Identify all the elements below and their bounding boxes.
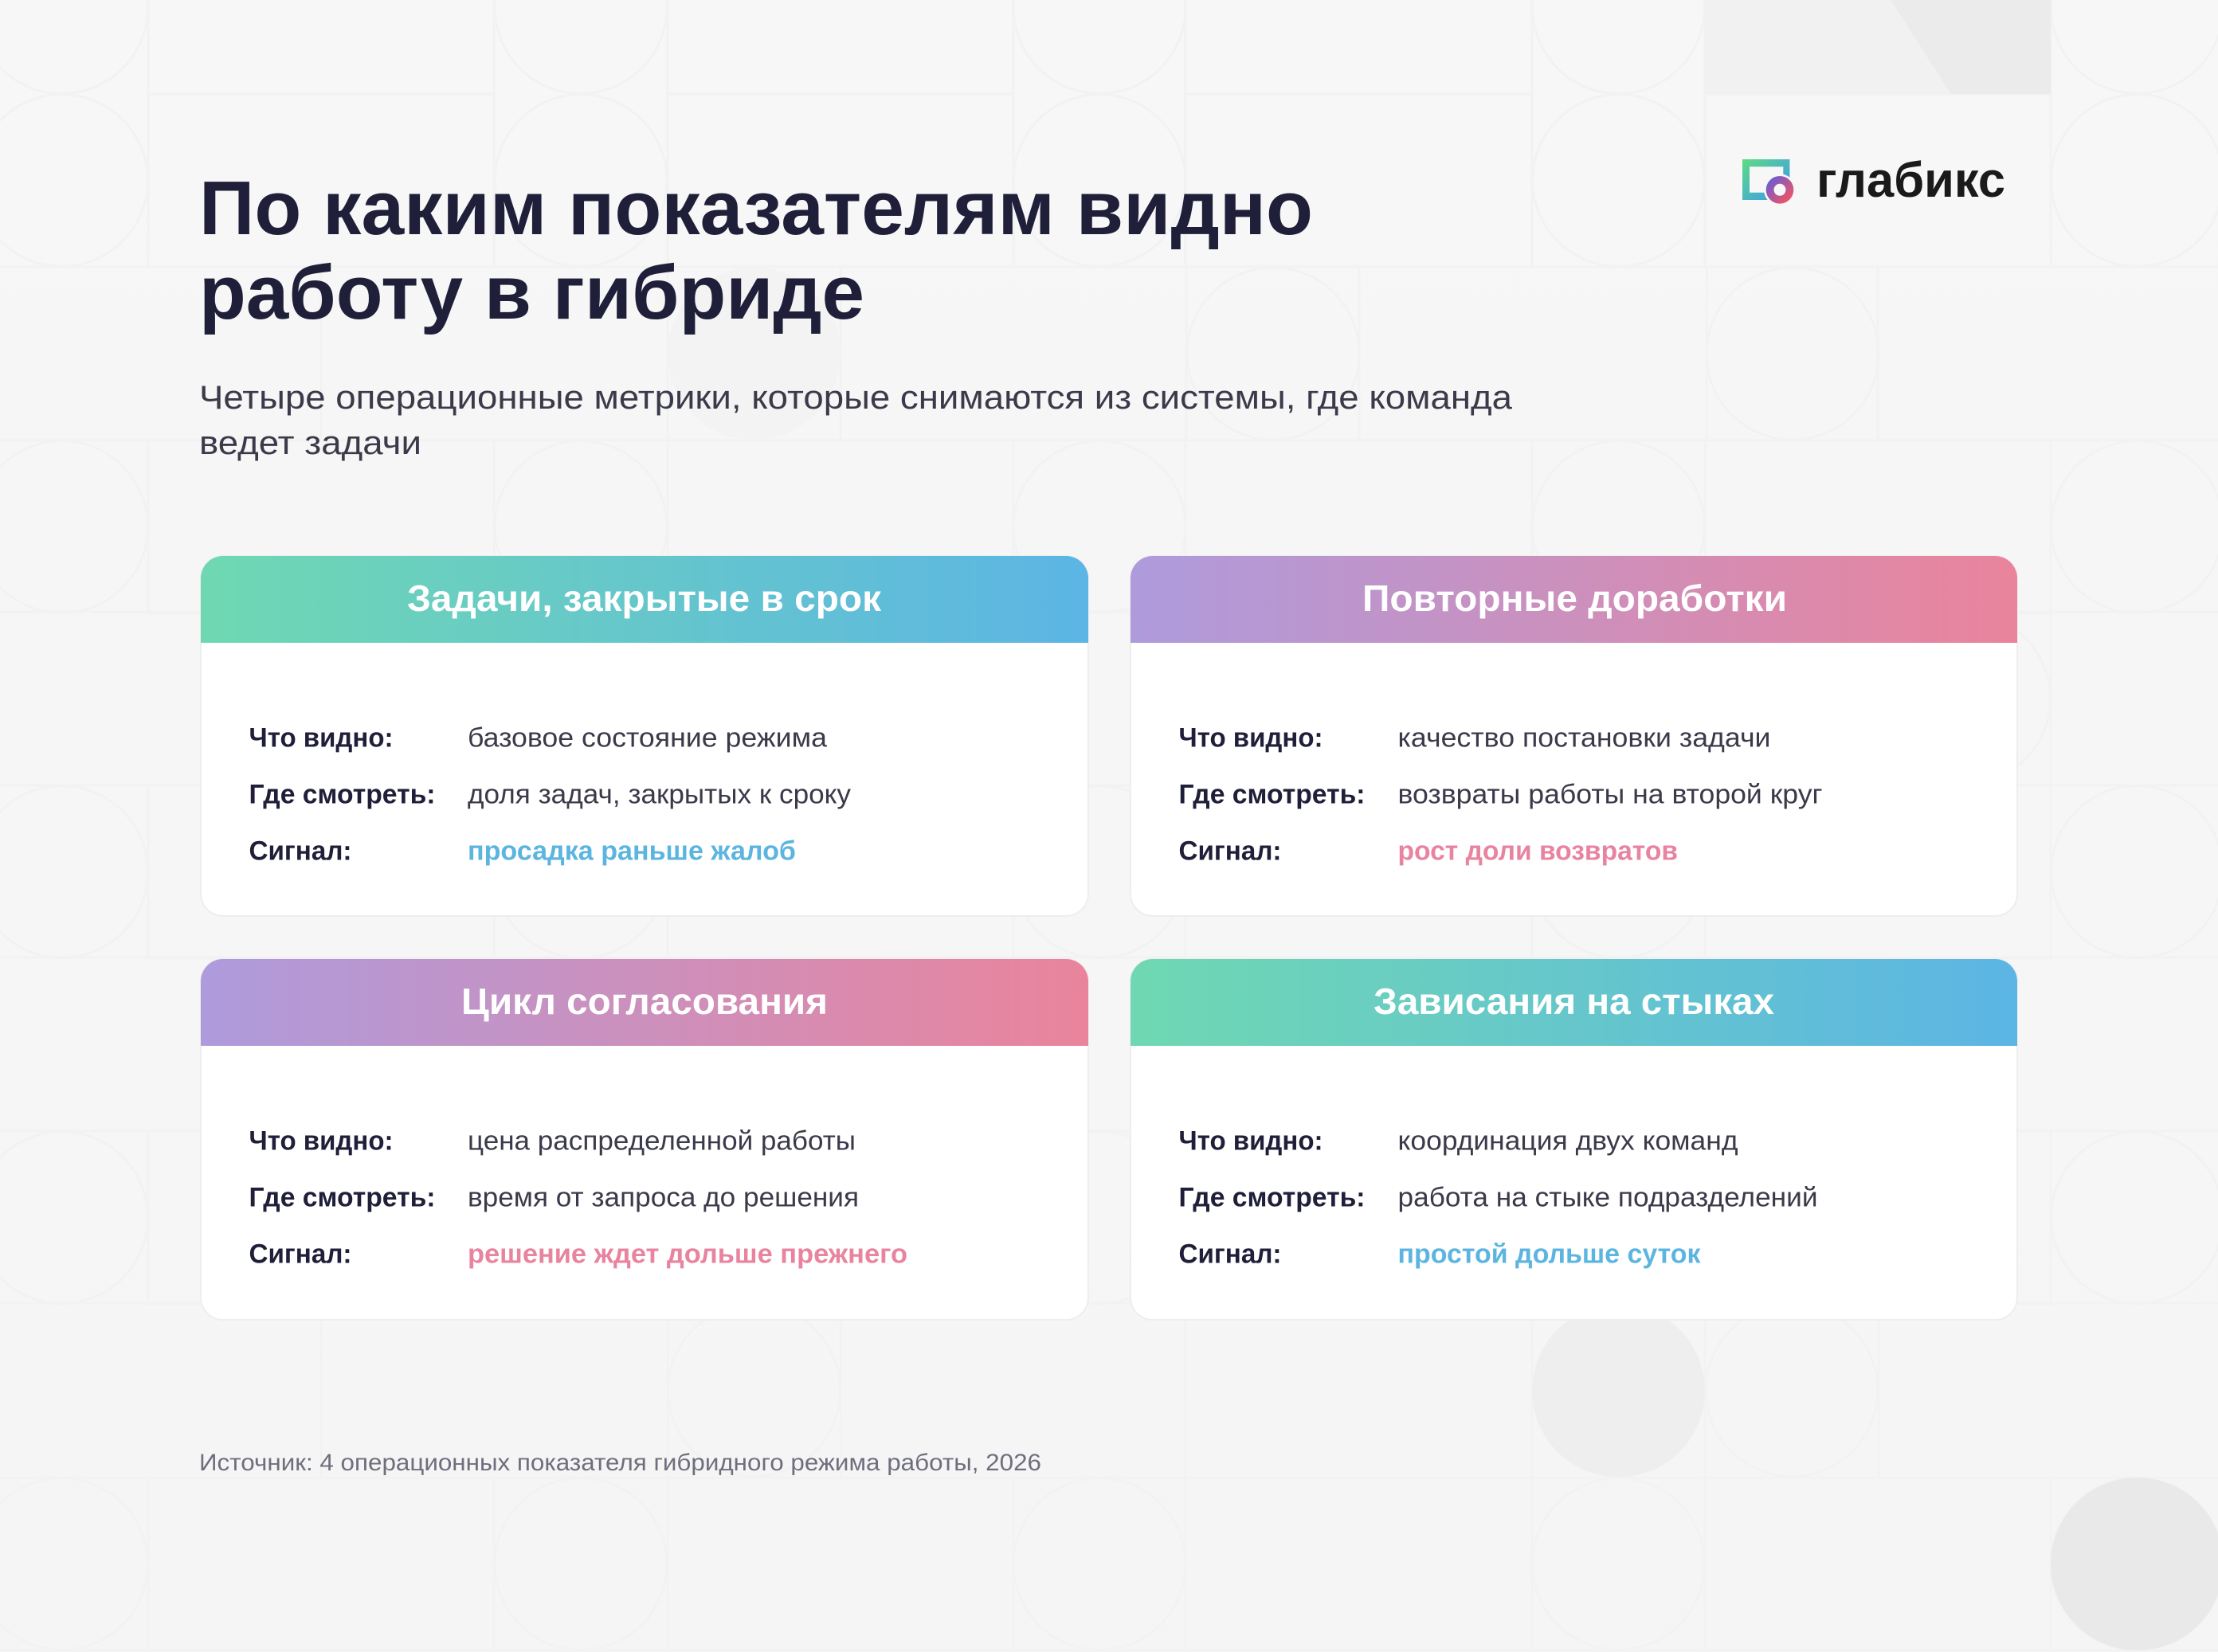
panel: Цикл согласования xyxy=(201,959,1088,1320)
panel: Задачи, закрытые в срок: Где смотреть: xyxy=(249,779,435,809)
panel: Цикл согласования: Где смотреть: xyxy=(249,1182,435,1212)
subtitle: ведет задачи xyxy=(199,424,421,461)
subtitle xyxy=(199,378,1513,461)
panel: Зависания на стыках: простой дольше суток xyxy=(1397,1239,1701,1270)
panel: Цикл согласования: цена распределенной работы xyxy=(468,1126,856,1157)
panel: Повторные доработки: Что видно: xyxy=(1179,723,1323,754)
panel: Задачи, закрытые в срок: Сигнал: xyxy=(249,836,352,867)
panel: Зависания на стыках: работа на стыке подразделений xyxy=(1397,1182,1818,1212)
panel: Цикл согласования: Сигнал: xyxy=(249,1239,352,1270)
subtitle: Четыре операционные метрики, которые снимаются из системы, где команда xyxy=(199,378,1513,416)
panel: Зависания на стыках: координация двух команд xyxy=(1397,1126,1738,1157)
panel: Задачи, закрытые в срок xyxy=(201,556,1088,916)
panel: Задачи, закрытые в срок: базовое состояние режима xyxy=(468,723,827,754)
logo wordmark: глабикс xyxy=(1816,153,2005,208)
panel: Зависания на стыках: Что видно: xyxy=(1179,1126,1323,1157)
panel: Зависания на стыках xyxy=(1131,959,2017,1320)
title: работу в гибриде xyxy=(199,250,864,335)
panel: Задачи, закрытые в срок: Задачи, закрытые в срок xyxy=(407,577,882,619)
title: По каким показателям видно xyxy=(199,166,1313,251)
panel: Зависания на стыках: Сигнал: xyxy=(1179,1239,1281,1270)
panel: Повторные доработки: Сигнал: xyxy=(1179,836,1281,867)
title xyxy=(199,166,1313,335)
panel: Цикл согласования: Что видно: xyxy=(249,1126,394,1157)
panel: Повторные доработки: рост доли возвратов xyxy=(1397,836,1678,867)
panel: Цикл согласования: решение ждет дольше прежнего xyxy=(468,1239,907,1270)
panel: Повторные доработки xyxy=(1131,556,2017,916)
panel: Повторные доработки: Повторные доработки xyxy=(1362,577,1787,619)
panel: Повторные доработки: Где смотреть: xyxy=(1179,779,1366,809)
panel: Задачи, закрытые в срок: Что видно: xyxy=(249,723,394,754)
panel: Повторные доработки: возвраты работы на второй круг xyxy=(1397,779,1823,809)
panel: Задачи, закрытые в срок: просадка раньше жалоб xyxy=(468,836,796,867)
panel: Задачи, закрытые в срок: доля задач, закрытых к сроку xyxy=(468,779,851,809)
panel: Зависания на стыках: Где смотреть: xyxy=(1179,1182,1366,1212)
logo: глабикс xyxy=(1742,153,2005,208)
panel: Цикл согласования: Цикл согласования xyxy=(461,981,828,1022)
source note: Источник: 4 операционных показателя гибридного режима работы, 2026 xyxy=(199,1450,1041,1476)
icon: logo mark xyxy=(1742,159,1796,206)
panel: Зависания на стыках: Зависания на стыках xyxy=(1374,981,1774,1022)
panel: Повторные доработки: качество постановки задачи xyxy=(1397,723,1770,754)
panel: Цикл согласования: время от запроса до решения xyxy=(468,1182,859,1212)
